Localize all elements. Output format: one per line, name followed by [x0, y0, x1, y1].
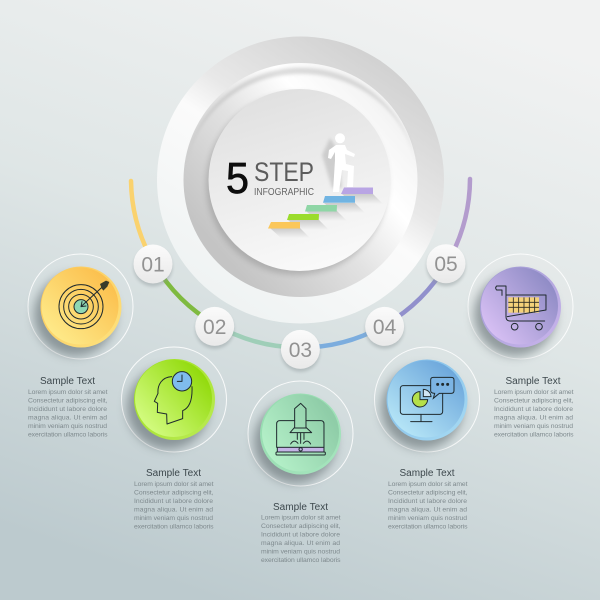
- step badge 04: 04: [373, 316, 397, 339]
- icon: rocket launching from laptop: [276, 403, 325, 455]
- text block: step 5: Incididunt ut labore dolore: [494, 406, 573, 413]
- text block: step 1: [28, 376, 108, 438]
- step badge 05: [426, 244, 466, 286]
- text block: step 1: minim veniam quis nostrud: [28, 423, 107, 430]
- panel: step 2 circle: [122, 347, 226, 452]
- title: 5 step infographic: [226, 154, 314, 203]
- text block: step 5: Sample Text: [506, 376, 561, 387]
- text block: step 5: exercitation ullamco laboris: [494, 432, 574, 438]
- text block: step 1: Lorem ipsum dolor sit amet: [28, 389, 108, 396]
- icon: head with clock: [154, 372, 192, 424]
- panel: step 4 circle: [374, 347, 480, 452]
- step badge 05: 05: [434, 253, 458, 276]
- step badge 01: [134, 244, 172, 286]
- central concentric circle hub: [157, 36, 444, 324]
- panel: step 1 circle: [28, 254, 133, 359]
- timeline arc: [131, 179, 470, 348]
- step badge 03: 03: [289, 339, 312, 362]
- text block: step 4: Sample Text: [400, 468, 455, 479]
- step badge 01: 01: [141, 254, 165, 276]
- text block: step 3: Lorem ipsum dolor sit amet: [261, 514, 341, 522]
- icon: monitor with pie chart and speech bubble: [400, 377, 454, 422]
- text block: step 4: minim veniam quis nostrud: [388, 515, 467, 522]
- text block: step 4: [388, 468, 468, 530]
- step badge 04: [365, 307, 404, 349]
- icon: target with arrow: [59, 281, 109, 329]
- text block: step 5: magna aliqua. Ut enim ad: [494, 414, 573, 422]
- text block: step 3: magna aliqua. Ut enim ad: [261, 540, 340, 547]
- staircase with five coloured steps: [268, 188, 383, 238]
- text block: step 2: magna aliqua. Ut enim ad: [134, 506, 213, 514]
- text block: step 5: [494, 376, 574, 438]
- text block: step 3: minim veniam quis nostrud: [261, 548, 340, 556]
- title: 5 step infographic: 5: [226, 154, 249, 203]
- text block: step 2: [134, 468, 214, 530]
- text block: step 5: Lorem ipsum dolor sit amet: [494, 389, 574, 396]
- icon: climbing person: [322, 133, 355, 192]
- text block: step 4: Lorem ipsum dolor sit amet: [388, 481, 468, 488]
- text block: step 2: Sample Text: [146, 468, 201, 479]
- text block: step 4: exercitation ullamco laboris: [388, 524, 468, 530]
- text block: step 4: Incididunt ut labore dolore: [388, 498, 467, 505]
- text block: step 1: magna aliqua. Ut enim ad: [28, 414, 107, 422]
- title: 5 step infographic: STEP: [254, 157, 314, 187]
- text block: step 2: exercitation ullamco laboris: [134, 524, 214, 530]
- text block: step 1: exercitation ullamco laboris: [28, 432, 108, 438]
- text block: step 2: Consectetur adipiscing elit,: [134, 490, 214, 496]
- text block: step 1: Sample Text: [40, 376, 95, 387]
- text block: step 1: Incididunt ut labore dolore: [28, 406, 107, 413]
- step badge 03: [281, 330, 320, 372]
- title: 5 step infographic: INFOGRAPHIC: [254, 186, 314, 198]
- text block: step 4: magna aliqua. Ut enim ad: [388, 506, 467, 514]
- step badge 02: 02: [203, 316, 226, 339]
- panel: step 5 circle: [468, 254, 573, 359]
- text block: step 5: minim veniam quis nostrud: [494, 423, 573, 430]
- step badge 02: [195, 307, 234, 349]
- text block: step 3: [261, 502, 341, 564]
- text block: step 3: exercitation ullamco laboris: [261, 557, 341, 564]
- text block: step 2: minim veniam quis nostrud: [134, 515, 213, 522]
- text block: step 2: Incididunt ut labore dolore: [134, 498, 213, 505]
- text block: step 5: Consectetur adipiscing elit,: [494, 398, 574, 404]
- text block: step 1: Consectetur adipiscing elit,: [28, 398, 108, 404]
- panel: step 3 circle: [248, 381, 353, 486]
- text block: step 3: Incididunt ut labore dolore: [261, 532, 340, 538]
- text block: step 4: Consectetur adipiscing elit,: [388, 490, 468, 496]
- text block: step 3: Sample Text: [273, 502, 328, 513]
- text block: step 3: Consectetur adipiscing elit,: [261, 523, 341, 530]
- text block: step 2: Lorem ipsum dolor sit amet: [134, 481, 214, 488]
- icon: shopping cart: [496, 286, 546, 330]
